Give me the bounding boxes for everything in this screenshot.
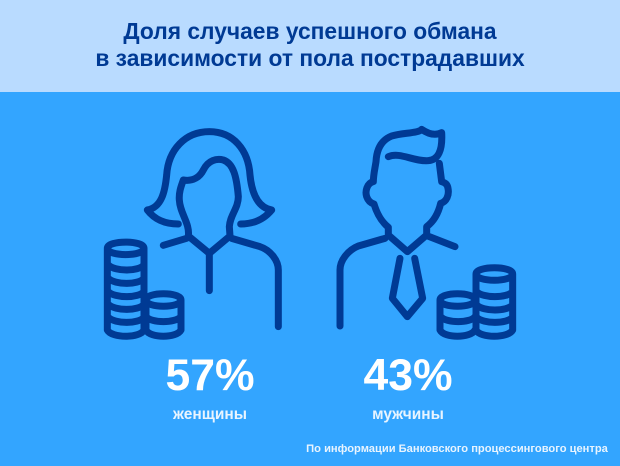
label: women: женщины bbox=[173, 406, 247, 423]
title bbox=[95, 18, 525, 71]
source note: По информации Банковского процессингового центра bbox=[306, 443, 608, 455]
label: men: мужчины bbox=[372, 406, 444, 423]
icon: man with coins bbox=[336, 126, 516, 340]
title: Доля случаев успешного обмана bbox=[123, 18, 497, 44]
stat: 57%: 57% bbox=[165, 351, 255, 400]
title: в зависимости от пола пострадавших bbox=[95, 45, 525, 71]
icon: woman with coins bbox=[104, 128, 282, 340]
header band bbox=[0, 0, 620, 92]
stat: 43%: 43% bbox=[363, 351, 453, 400]
